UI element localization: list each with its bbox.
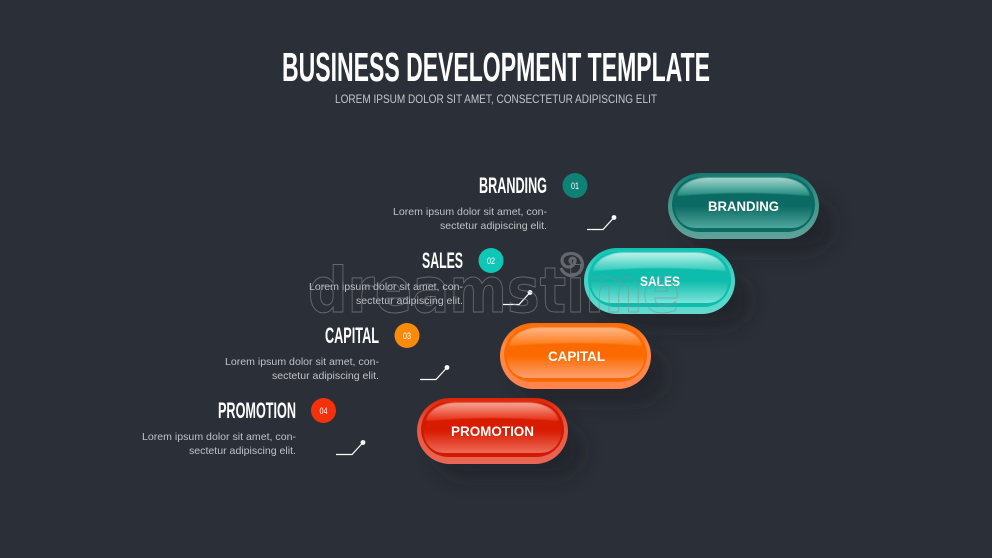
number badge 01 (562, 173, 588, 198)
number badge 03: 03 (403, 331, 411, 341)
pill button: promotion (417, 398, 583, 478)
panel: branding text (393, 173, 616, 232)
panel: capital text (225, 323, 449, 382)
panel: sales text (309, 248, 532, 307)
connector: branding (587, 215, 616, 230)
description: sales (309, 281, 463, 307)
description: capital (225, 356, 379, 382)
heading: capital: CAPITAL (325, 323, 379, 348)
description: capital: Lorem ipsum dolor sit amet, con- (225, 356, 379, 368)
number badge 04 (311, 398, 336, 423)
description: branding (393, 206, 547, 232)
pill button: sales (584, 248, 750, 328)
number badge 02 (478, 248, 504, 273)
label: CAPITAL (548, 349, 605, 364)
label: SALES (640, 274, 680, 289)
pill button: capital (500, 323, 666, 403)
heading: sales: SALES (422, 248, 463, 273)
number badge 01: 01 (571, 181, 579, 191)
label: PROMOTION (451, 424, 534, 439)
watermark: dreamstime (308, 254, 680, 327)
description: promotion: sectetur adipiscing elit. (189, 445, 296, 457)
number badge 04: 04 (320, 406, 328, 416)
connector: promotion (336, 440, 365, 454)
description: sales: sectetur adipiscing elit. (356, 295, 463, 307)
heading: promotion: PROMOTION (218, 398, 296, 423)
description: promotion (142, 431, 296, 457)
connector: sales (503, 290, 532, 304)
number badge 03 (394, 323, 420, 348)
number badge 02: 02 (487, 256, 495, 266)
panel: promotion text (142, 398, 365, 457)
description: branding: sectetur adipiscing elit. (440, 220, 547, 232)
description: sales: Lorem ipsum dolor sit amet, con- (309, 281, 463, 293)
pill button: branding (668, 173, 834, 253)
connector: capital (420, 365, 449, 380)
description: promotion: Lorem ipsum dolor sit amet, con- (142, 431, 296, 443)
description: branding: Lorem ipsum dolor sit amet, con- (393, 206, 547, 218)
label: BRANDING (708, 199, 779, 214)
subtitle: LOREM IPSUM DOLOR SIT AMET, CONSECTETUR ADIPISCING ELIT (335, 94, 657, 106)
heading: branding: BRANDING (479, 173, 547, 198)
description: capital: sectetur adipiscing elit. (272, 370, 379, 382)
